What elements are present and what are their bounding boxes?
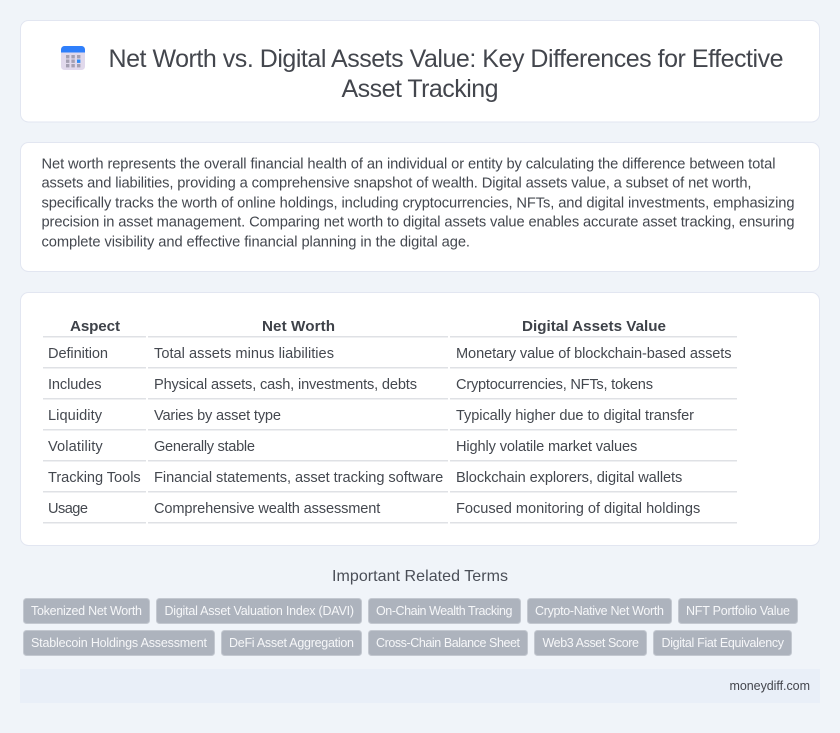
summary text: Net worth represents the overall financial health of an individual or entity by calculating the difference between total xyxy=(42,156,776,172)
tag: defi asset aggregation xyxy=(222,630,362,656)
row: definition xyxy=(48,346,732,362)
tag: tokenized net worth xyxy=(24,598,150,624)
summary text: specifically tracks the worth of online holdings, including cryptocurrencies, NFTs, and digital investments, emphasizing xyxy=(42,195,794,211)
row: volatility: Highly volatile market values xyxy=(456,439,637,455)
tag: tokenized net worth: Tokenized Net Worth xyxy=(31,604,142,618)
row: usage: Comprehensive wealth assessment xyxy=(154,501,380,517)
tag: davi xyxy=(156,598,362,624)
tag: digital fiat equivalency: Digital Fiat Equivalency xyxy=(662,636,785,650)
row: tracking tools: Financial statements, asset tracking software xyxy=(154,470,443,486)
row: includes xyxy=(48,377,653,393)
tag: crypto-native net worth xyxy=(528,598,672,624)
title: Net Worth vs. Digital Assets Value: Key Differences for Effective xyxy=(108,45,784,73)
title xyxy=(108,45,784,103)
related term tags xyxy=(24,598,798,656)
tag: digital fiat equivalency xyxy=(654,630,792,656)
row: liquidity: Typically higher due to digital transfer xyxy=(456,408,694,424)
row: tracking tools xyxy=(48,470,682,486)
row: liquidity: Varies by asset type xyxy=(154,408,281,424)
header panel xyxy=(20,20,820,122)
row: tracking tools: Blockchain explorers, digital wallets xyxy=(456,470,682,486)
tag: cross-chain balance sheet: Cross-Chain Balance Sheet xyxy=(376,636,521,650)
row: usage: Usage xyxy=(48,501,88,517)
row: includes: Physical assets, cash, investments, debts xyxy=(154,377,417,393)
summary text: complete visibility and effective financial planning in the digital age. xyxy=(42,234,470,250)
footer xyxy=(20,669,820,703)
comparison table panel xyxy=(20,292,820,546)
icon: calendar xyxy=(61,46,85,70)
tag: nft portfolio value xyxy=(678,598,798,624)
table header: Net Worth xyxy=(262,318,335,335)
tag: nft portfolio value: NFT Portfolio Value xyxy=(686,604,790,618)
summary panel xyxy=(20,142,820,272)
tag: web3 asset score xyxy=(534,630,646,656)
row: definition: Definition xyxy=(48,346,108,362)
row: usage xyxy=(48,501,700,517)
row: includes: Cryptocurrencies, NFTs, tokens xyxy=(456,377,653,393)
table header: Aspect xyxy=(70,318,120,335)
row: liquidity xyxy=(48,408,694,424)
row: liquidity: Liquidity xyxy=(48,408,103,424)
tag: cross-chain balance sheet xyxy=(368,630,528,656)
table header: Digital Assets Value xyxy=(522,318,666,335)
tag: davi: Digital Asset Valuation Index (DAVI) xyxy=(164,604,354,618)
tag: stablecoin holdings: Stablecoin Holdings Assessment xyxy=(31,636,208,650)
row: volatility xyxy=(48,439,637,455)
row: usage: Focused monitoring of digital holdings xyxy=(456,501,700,517)
row: volatility: Generally stable xyxy=(154,439,255,455)
summary text xyxy=(42,156,794,250)
tag: web3 asset score: Web3 Asset Score xyxy=(542,636,639,650)
tag: defi asset aggregation: DeFi Asset Aggregation xyxy=(229,636,354,650)
tag: on-chain wealth tracking: On-Chain Wealth Tracking xyxy=(376,604,513,618)
footer: moneydiff.com xyxy=(730,679,810,693)
row: includes: Includes xyxy=(48,377,102,393)
tag: on-chain wealth tracking xyxy=(368,598,520,624)
summary text: precision in asset management. Comparing net worth to digital assets value enables accurate asset tracking, ensuring xyxy=(42,214,794,230)
row: volatility: Volatility xyxy=(48,439,103,455)
row: tracking tools: Tracking Tools xyxy=(48,470,141,486)
title: Asset Tracking xyxy=(342,75,498,103)
summary text: assets and liabilities, providing a comprehensive snapshot of wealth. Digital assets value, a subset of net worth, xyxy=(42,175,752,191)
tag: crypto-native net worth: Crypto-Native Net Worth xyxy=(535,604,664,618)
tag: stablecoin holdings xyxy=(24,630,214,656)
row: definition: Monetary value of blockchain-based assets xyxy=(456,346,732,362)
table header xyxy=(70,318,666,335)
related terms heading: Important Related Terms xyxy=(332,568,508,585)
row: definition: Total assets minus liabilities xyxy=(154,346,334,362)
